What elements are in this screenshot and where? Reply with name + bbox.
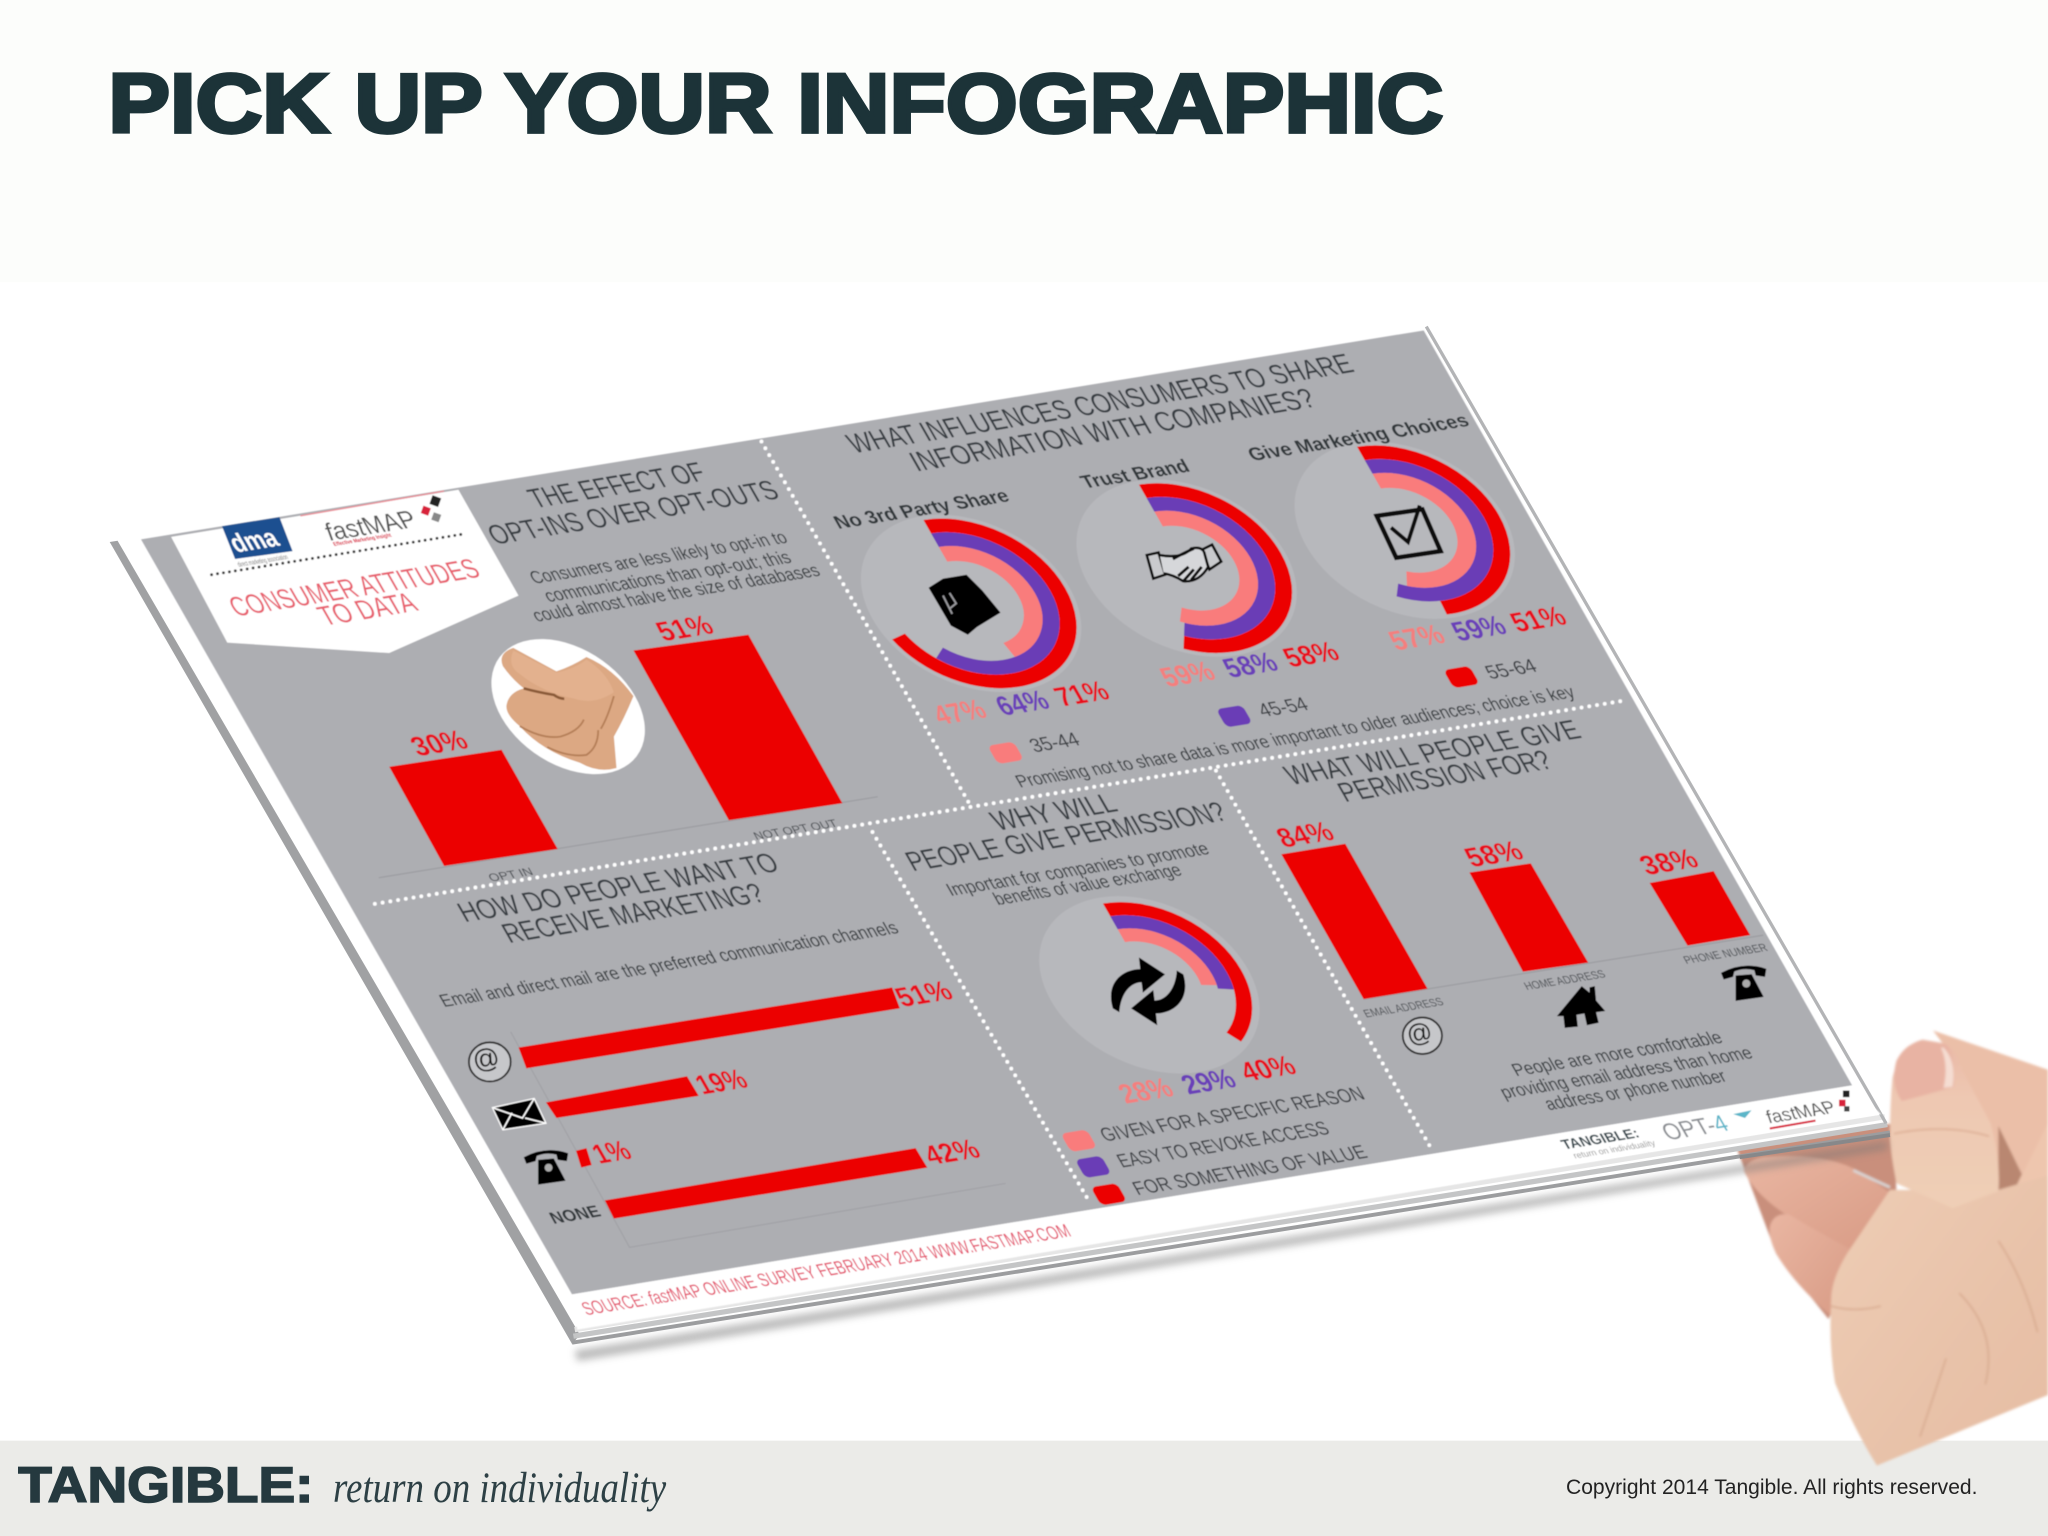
- panel: header badge: fastMAP: [319, 506, 422, 546]
- values: chart 2: 58%: [1217, 647, 1284, 684]
- label: home address: HOME ADDRESS: [1522, 969, 1608, 993]
- value: 84%: 84%: [1271, 816, 1340, 854]
- sheet: board edges and shadow: [110, 327, 1890, 1361]
- icon: at sign: @: [468, 1042, 504, 1076]
- footer logos on the sheet: return on individuality: [1571, 1138, 1658, 1160]
- label: no 3rd party share: No 3rd Party Share: [830, 486, 1014, 534]
- values: chart 3: [1383, 601, 1572, 657]
- bar: email address 84%: [1281, 844, 1428, 999]
- values: permission: 28%: [1113, 1073, 1179, 1110]
- panel: header badge: Effective Marketing Insight: [332, 533, 393, 548]
- label: not opt out: NOT OPT OUT: [752, 818, 840, 843]
- icon: checkbox: [1377, 505, 1441, 558]
- panel: why will people give permission: [900, 788, 1371, 1206]
- heading: receive marketing: RECEIVE MARKETING?: [496, 878, 770, 949]
- values: permission: [1113, 1050, 1302, 1110]
- text: comfortable providing email: [1496, 1027, 1756, 1114]
- heading: influences: WHAT INFLUENCES CONSUMERS TO SHARE: [841, 348, 1359, 460]
- text: opt-in description: [525, 527, 824, 625]
- values: chart 1: 64%: [990, 685, 1055, 722]
- legend: given for a specific reason: GIVEN FOR A SPECIFIC REASON: [1096, 1083, 1369, 1146]
- footer band: return on individuality: [333, 1465, 667, 1512]
- bar: home address 58%: [1469, 863, 1588, 972]
- bar: none 42%: [605, 1148, 927, 1219]
- legend: 35-44: [987, 729, 1084, 764]
- icon: telephone: [1721, 966, 1766, 1001]
- heading: opt-ins: THE EFFECT OF: [522, 457, 712, 515]
- values: chart 1: 47%: [927, 694, 992, 731]
- icon: exchange arrows: [1111, 957, 1185, 1025]
- icon: safe: [929, 575, 1000, 635]
- panel: header badge: dma: [224, 523, 285, 558]
- values: chart 2: 59%: [1155, 656, 1221, 693]
- chart: permission donut: [1001, 882, 1297, 1088]
- text: promising note: Promising not to share data is more important to older audiences; choice is key: [1011, 681, 1579, 791]
- text: opt-in description: could almost halve the size of databases: [528, 560, 824, 625]
- label: email address: EMAIL ADDRESS: [1361, 996, 1447, 1020]
- heading: why will: WHY WILL: [985, 788, 1123, 837]
- value: 42%: 42%: [918, 1134, 986, 1172]
- grey sheet background: [141, 330, 1852, 1294]
- footer logos on the sheet: fastMAP: [1761, 1097, 1840, 1127]
- panel: header badge: [171, 490, 519, 653]
- text: comfortable providing email: address or phone number: [1540, 1065, 1730, 1114]
- axis: [1364, 935, 1763, 999]
- values: chart 1: [927, 675, 1115, 731]
- footer band: Copyright 2014 Tangible. All rights reserved.: [1566, 1474, 1977, 1499]
- label: trust brand: Trust Brand: [1077, 456, 1194, 493]
- heading: permission for: PERMISSION FOR?: [1332, 745, 1558, 808]
- value: 51%: 51%: [650, 610, 719, 648]
- values: chart 3: 57%: [1383, 619, 1451, 657]
- icon: handshake: [1147, 545, 1221, 581]
- value: 38%: 38%: [1634, 843, 1704, 882]
- legend: easy to revoke access: [1075, 1118, 1334, 1178]
- bar: direct mail 19%: [546, 1076, 699, 1118]
- heading: influences: INFORMATION WITH COMPANIES?: [904, 383, 1322, 478]
- legend: 55-64: [1443, 656, 1541, 688]
- legend: for something of value: FOR SOMETHING OF VALUE: [1129, 1142, 1371, 1200]
- values: chart 3: 51%: [1505, 601, 1572, 639]
- icon: pointing hand: [464, 629, 673, 784]
- bar: phone number 38%: [1650, 871, 1750, 946]
- chart: no 3rd party share donut: [823, 500, 1119, 707]
- infographic sheet: [141, 330, 1881, 1330]
- axis: [379, 797, 878, 878]
- value: 19%: 19%: [690, 1064, 753, 1101]
- legend: 35-44: 35-44: [1025, 729, 1084, 757]
- icon: house: [1557, 986, 1605, 1028]
- bar: phone 1%: [576, 1148, 592, 1168]
- panel: how do people want to receive marketing: [435, 848, 1006, 1247]
- text: value exchange: benefits of value exchange: [989, 859, 1185, 909]
- panel: what will people give permission for: [1271, 714, 1770, 1114]
- text: opt-in description: Consumers are less likely to opt-in to: [525, 527, 791, 588]
- source line: SOURCE: fastMAP ONLINE SURVEY FEBRUARY 2014 WWW.FASTMAP.COM: [578, 1221, 1075, 1320]
- footer band: [0, 1441, 2048, 1536]
- values: permission: 29%: [1175, 1063, 1242, 1101]
- text: opt-in description: communications than opt-out; this: [540, 547, 795, 606]
- panel: header badge: CONSUMER ATTITUDES: [223, 553, 486, 623]
- icon: telephone: [524, 1150, 568, 1185]
- text: comfortable providing email: providing email address than home: [1496, 1042, 1756, 1102]
- text: comfortable providing email: People are more comfortable: [1507, 1027, 1726, 1080]
- label: give marketing choices: Give Marketing Choices: [1244, 411, 1473, 466]
- footer logos on the sheet: OPT-4: [1657, 1111, 1734, 1146]
- title: PICK UP YOUR INFOGRAPHIC: [108, 56, 1443, 150]
- heading: permission for: WHAT WILL PEOPLE GIVE: [1279, 714, 1587, 791]
- values: chart 3: 59%: [1446, 610, 1512, 648]
- heading: receive marketing: HOW DO PEOPLE WANT TO: [452, 848, 785, 929]
- text: value exchange: Important for companies to promote: [942, 838, 1213, 900]
- values: permission: 40%: [1234, 1050, 1302, 1088]
- footer logos on the sheet: [1558, 1091, 1849, 1160]
- values: chart 2: [1155, 636, 1345, 693]
- panel: header badge: TO DATA: [312, 587, 423, 632]
- value: 1%: 1%: [586, 1135, 637, 1170]
- bar: opt in 30%: [389, 750, 558, 866]
- legend: 55-64: 55-64: [1481, 656, 1541, 684]
- text: preferred channels: Email and direct mail are the preferred communication channels: [435, 917, 902, 1011]
- hand holding the sheet: [1737, 1031, 2048, 1465]
- panel: header badge: direct marketing association: [236, 553, 290, 569]
- panel: what influences consumers to share: [823, 348, 1579, 791]
- icon: at sign: @: [1403, 1018, 1436, 1049]
- dotted section dividers: [375, 441, 1627, 1202]
- label: none: NONE: [546, 1202, 604, 1228]
- label: phone number: PHONE NUMBER: [1681, 942, 1770, 967]
- white strip along the bottom of the sheet: [572, 1085, 1881, 1330]
- footer logos on the sheet: TANGIBLE:: [1558, 1126, 1643, 1153]
- footer band: TANGIBLE:: [18, 1457, 313, 1513]
- values: chart 1: 71%: [1049, 675, 1115, 713]
- values: chart 2: 58%: [1277, 636, 1345, 674]
- chart: trust brand donut: [1039, 465, 1335, 671]
- value: 30%: 30%: [405, 725, 474, 763]
- icon: envelope: [492, 1098, 546, 1130]
- value: 51%: 51%: [889, 975, 958, 1013]
- bar: email 51%: [519, 987, 900, 1068]
- heading: why will: PEOPLE GIVE PERMISSION?: [900, 797, 1233, 878]
- label: opt in: OPT IN: [486, 866, 536, 884]
- bar: not opt out 51%: [633, 635, 842, 820]
- legend: easy to revoke access: EASY TO REVOKE ACCESS: [1113, 1118, 1334, 1172]
- axis: [511, 1032, 1006, 1247]
- panel: effect of opt-ins over opt-outs: [379, 457, 878, 884]
- legend: 45-54: [1216, 694, 1313, 728]
- legend: 45-54: 45-54: [1254, 694, 1313, 722]
- heading: opt-ins: OPT-INS OVER OPT-OUTS: [482, 475, 785, 551]
- value: 58%: 58%: [1459, 835, 1529, 874]
- chart: give marketing choices donut: [1257, 427, 1553, 633]
